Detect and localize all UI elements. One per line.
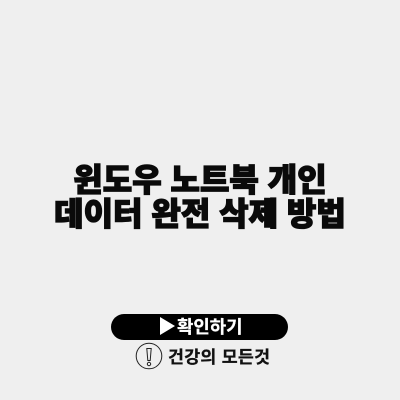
title bbox=[54, 162, 346, 232]
button: 확인하기 bbox=[111, 314, 288, 340]
icon: play triangle bbox=[160, 317, 175, 335]
title: 데이터 완전 삭제 방법 bbox=[54, 196, 346, 232]
title: 윈도우 노트북 개인 bbox=[73, 162, 327, 198]
icon: exclamation circle bbox=[136, 342, 162, 370]
brand text: 건강의 모든것 bbox=[168, 347, 270, 367]
button label: 확인하기 bbox=[177, 317, 242, 337]
